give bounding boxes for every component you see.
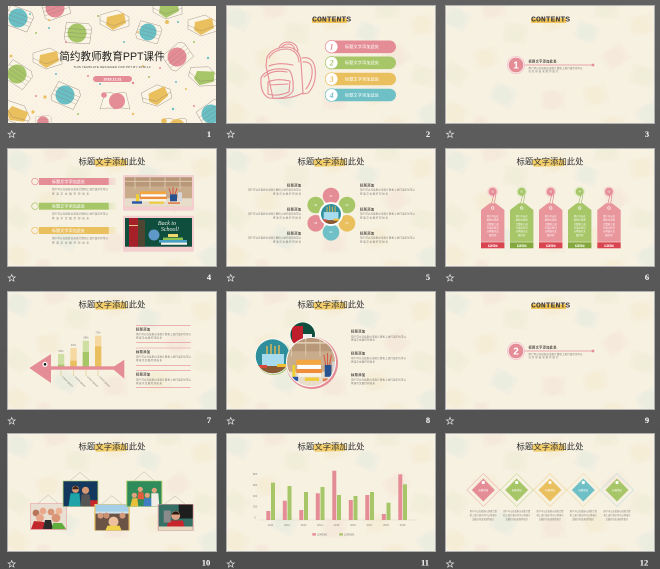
- bone labels: Lorem ipsum: [61, 376, 74, 388]
- title highlight: [94, 302, 127, 310]
- number 11: 11: [421, 558, 429, 568]
- right text 3: [360, 230, 415, 244]
- text block 3: 将演示文稿打印出来: [351, 381, 375, 385]
- diamond 3: 机上进行演示也可以将演示: [536, 513, 564, 517]
- chart legend: LOREM2: [344, 533, 355, 536]
- number 6: 6: [645, 272, 649, 282]
- bar chart: [253, 471, 417, 527]
- text block 2: [351, 350, 406, 363]
- right text block 3: 标题添加: [136, 372, 150, 377]
- bar chart: 2011: [268, 523, 274, 527]
- title highlight: [94, 159, 127, 167]
- tag 2: 标题添加: [517, 243, 527, 247]
- background: [220, 281, 446, 422]
- slide 8: circle photos: [226, 291, 436, 410]
- list item 1: 将演示文稿打印出来: [52, 192, 89, 196]
- photo frame 4: [126, 481, 162, 507]
- tag 5: 计算机上进: [603, 222, 616, 226]
- tag 4: 行演示也可: [574, 226, 586, 230]
- slide 3: section 1: [439, 0, 660, 136]
- number 5: 5: [426, 272, 430, 282]
- diamond 5: 机上进行演示也可以将演示: [604, 513, 631, 517]
- section number badge: [507, 342, 525, 360]
- right text block 2: 将演示文稿打印出来: [136, 358, 162, 362]
- background: [439, 423, 660, 564]
- icon: backpack: [261, 42, 315, 98]
- diamond 4: [567, 474, 600, 521]
- number 1: 1: [207, 129, 211, 139]
- right text 1: 标题添加: [360, 182, 374, 187]
- highlight: [531, 18, 566, 23]
- section description: 用户可以在投影仪或者计算机上进行演示也可以: [528, 66, 583, 70]
- menu item 2: 标题文字添加此处: [345, 59, 379, 65]
- petal diagram: [307, 188, 355, 241]
- connector line: [524, 64, 594, 66]
- bar chart: 2015: [334, 523, 340, 527]
- diamond 2: 文稿打印出来制作胶片: [505, 517, 529, 521]
- left text 2: 将演示文稿打印出来: [273, 216, 301, 220]
- diamond 3: 用户可以在投影仪或者计算: [536, 509, 564, 513]
- diamond 5: 用户可以在投影仪或者计算: [604, 509, 631, 513]
- menu item 2: [325, 56, 396, 69]
- right text 3: 用户可以在投影仪或者计算机上进行演示也可以: [360, 236, 415, 240]
- bar 4: [95, 331, 101, 367]
- section description: 在打印出来制作胶片: [528, 355, 559, 359]
- text block 2: 标题添加: [351, 350, 365, 355]
- tag 4: 计算机上进: [574, 222, 586, 226]
- slide 1: cover: [8, 6, 216, 123]
- tag 4: 用户可以在: [574, 214, 586, 218]
- slide 2: contents: [220, 0, 446, 136]
- tag 5: 用户可以在: [603, 214, 616, 218]
- right text 2: [360, 206, 415, 220]
- left text 1: 将演示文稿打印出来: [273, 192, 301, 196]
- background: [1, 423, 227, 564]
- text block 2: 将演示文稿打印出来: [351, 359, 375, 363]
- list item 2: 将演示文稿打印出来: [52, 216, 89, 220]
- menu item 4: [325, 89, 396, 101]
- left text 3: 用户可以在投影仪或者计算机上进行演示也可以: [248, 236, 301, 240]
- petal diagram: 03: [346, 222, 349, 225]
- icon: star 9: [446, 417, 454, 424]
- list item 1: 标题文字添加此处: [52, 178, 85, 184]
- number 10: 10: [202, 558, 210, 568]
- number 12: 12: [640, 558, 648, 568]
- diamond 1: 文稿打印出来制作胶片: [472, 517, 495, 521]
- right text 2: 标题添加: [360, 206, 374, 211]
- right text block 2: 标题添加: [136, 349, 150, 354]
- bar chart: 800: [253, 472, 258, 476]
- right text block 1: 将演示文稿打印出来: [136, 335, 162, 339]
- petal diagram: 04: [330, 231, 333, 234]
- section description: 在打印出来制作胶片: [528, 69, 559, 73]
- contents heading: CONTENTS: [312, 16, 352, 24]
- bar 2: [70, 343, 77, 367]
- photo frame 3: [94, 504, 130, 531]
- tag 5: 行演示也可: [603, 226, 616, 230]
- diamond 1: 机上进行演示也可以将演示: [470, 513, 498, 517]
- right text 1: 将演示文稿打印出来: [360, 192, 388, 196]
- left text 2: [248, 206, 301, 220]
- tag 3: [539, 186, 562, 248]
- diamond 3: 文稿打印出来制作胶片: [539, 517, 562, 521]
- tag 2: 用户可以在: [516, 214, 528, 218]
- right text 3: 将演示文稿打印出来: [360, 240, 388, 244]
- bar chart: 2018: [383, 523, 389, 527]
- slide 12: diamonds: [439, 423, 660, 564]
- icon: star 8: [227, 417, 234, 424]
- slide 11: bar chart: [220, 423, 446, 564]
- title: 标题文字添加此处: [516, 442, 584, 452]
- diamond 4: 用户可以在投影仪或者计算: [570, 509, 598, 513]
- text block 1: 将演示文稿打印出来: [351, 338, 375, 342]
- background: [1, 138, 227, 279]
- list item 2: 标题文字添加此处: [52, 203, 85, 209]
- diamond 1: [467, 474, 500, 521]
- menu item 4: 标题文字添加此处: [345, 92, 379, 98]
- tag 1: 以将演示文: [487, 229, 499, 233]
- tag 5: [597, 186, 621, 248]
- tag 4: 04: [578, 191, 582, 194]
- title: 标题文字添加此处: [516, 157, 584, 167]
- tag 3: 行演示也可: [545, 226, 557, 230]
- text block 1: 标题添加: [351, 329, 365, 334]
- list item 1: [32, 178, 116, 196]
- bar chart: 2014: [317, 523, 323, 527]
- title highlight: [313, 444, 346, 452]
- menu item 1: 1: [330, 43, 334, 52]
- petal diagram: 05: [314, 222, 318, 225]
- left text 1: 用户可以在投影仪或者计算机上进行演示也可以: [248, 188, 301, 192]
- slide 5: petal diagram: [226, 148, 436, 267]
- tag 4: 以将演示文: [574, 229, 586, 233]
- number 2: 2: [426, 129, 430, 139]
- menu item 3: [325, 73, 396, 85]
- title highlight: [532, 444, 565, 452]
- cover background with colourful books: [8, 6, 216, 123]
- bar 1: 50%: [58, 349, 64, 353]
- diamond 2: 机上进行演示也可以将演示: [503, 513, 531, 517]
- hanger strings: [38, 472, 185, 504]
- bar chart: 2017: [367, 523, 373, 527]
- section number badge: 2: [513, 347, 519, 358]
- background: [439, 138, 660, 279]
- menu item 3: 3: [329, 75, 334, 84]
- bar 1: [58, 349, 64, 367]
- background: [220, 423, 446, 564]
- photo circle: bookshelf: [286, 337, 338, 389]
- section description: [528, 66, 583, 73]
- menu item 2: 2: [329, 59, 334, 68]
- right text 2: 用户可以在投影仪或者计算机上进行演示也可以: [360, 212, 415, 216]
- diamond 4: 文稿打印出来制作胶片: [572, 517, 595, 521]
- icon: star 1: [8, 131, 15, 138]
- photo panel 1: [123, 175, 194, 211]
- slide 6: price tags: [439, 138, 660, 279]
- petal diagram: 02: [346, 204, 349, 207]
- cover subtitle: THIS TEMPLATE DESIGNED FOR PPT BY 2018.12: [74, 65, 151, 69]
- icon: star 10: [8, 560, 15, 567]
- section number badge: [507, 56, 525, 74]
- menu item 1: 标题文字添加此处: [345, 43, 379, 49]
- tag 3: 投影仪或者: [545, 218, 557, 222]
- slide 10: hanging photos: [1, 423, 227, 564]
- tag 4: 稿打印: [576, 233, 584, 237]
- background: [220, 0, 446, 136]
- photo circle: red book: [290, 322, 316, 344]
- tag 4: [568, 186, 591, 248]
- photo frame 1: [30, 503, 67, 530]
- icon: star 11: [227, 560, 234, 567]
- chart legend: [312, 533, 355, 536]
- left text 1: 标题添加: [287, 182, 301, 187]
- list item 3: [32, 227, 116, 244]
- icon: star 12: [446, 560, 454, 567]
- text block 1: [351, 329, 406, 342]
- text block 2: 用户可以在投影仪或者计算机上进行演示也可以: [351, 356, 406, 360]
- right text block 3: 将演示文稿打印出来: [136, 381, 162, 385]
- list item 3: 标题文字添加此处: [52, 227, 85, 233]
- diamond 4: 标题添加: [579, 488, 589, 492]
- right text block 3: 用户可以在投影仪或者计算机上进行演示也可以: [136, 377, 191, 381]
- title: 标题文字添加此处: [298, 442, 365, 452]
- highlight: [531, 304, 566, 309]
- tag 2: 02: [520, 191, 524, 194]
- menu item 1: [325, 40, 396, 53]
- title: 标题文字添加此处: [78, 442, 146, 452]
- photo circle: teal classroom: [255, 338, 291, 375]
- right text 3: 标题添加: [360, 230, 374, 235]
- slide 4: list with photos: [1, 138, 227, 279]
- tag 1: 计算机上进: [487, 222, 499, 226]
- icon: star 2: [227, 131, 234, 138]
- date pill: [93, 76, 132, 82]
- tag 1: 标题添加: [488, 243, 498, 247]
- number 9: 9: [645, 415, 649, 425]
- text block 1: 用户可以在投影仪或者计算机上进行演示也可以: [351, 334, 406, 338]
- section heading: 标题文字添加此处: [528, 59, 557, 64]
- title: 标题文字添加此处: [298, 300, 365, 310]
- background: [220, 138, 446, 279]
- menu item 3: 标题文字添加此处: [345, 76, 379, 82]
- bone labels: Lorem ipsum: [86, 376, 99, 388]
- tag 3: 计算机上进: [545, 222, 557, 226]
- bar 3: 58%: [83, 336, 89, 340]
- list item 2: 用户可以在投影仪或者计算机上进行演示也可以: [52, 212, 108, 216]
- tag 5: 投影仪或者: [603, 218, 616, 222]
- list item 2: [32, 203, 116, 220]
- diamond 5: 文稿打印出来制作胶片: [606, 517, 629, 521]
- petal diagram: 01: [330, 195, 333, 198]
- date pill: 2018.12.31: [104, 77, 122, 81]
- bar chart: 2013: [301, 523, 307, 527]
- tag 5: 以将演示文: [603, 229, 616, 233]
- title highlight: [313, 302, 346, 310]
- section description: [528, 352, 583, 359]
- left text 3: 标题添加: [287, 230, 301, 235]
- right text block 1: 用户可以在投影仪或者计算机上进行演示也可以: [136, 332, 191, 336]
- section heading: 标题文字添加此处: [528, 345, 557, 350]
- bone labels: [61, 370, 111, 388]
- tag 5: 05: [608, 191, 611, 194]
- tag 2: [510, 186, 533, 248]
- title highlight: [94, 444, 127, 452]
- left text 1: [248, 182, 301, 196]
- left text 3: 将演示文稿打印出来: [273, 240, 301, 244]
- left text 2: 标题添加: [287, 206, 301, 211]
- bar chart: 600: [253, 483, 258, 487]
- bar chart: 2019: [400, 523, 406, 527]
- diamond 3: [534, 474, 566, 521]
- diamond 2: 标题添加: [512, 488, 522, 492]
- bar 2: 60%: [71, 343, 77, 347]
- diamond 2: 用户可以在投影仪或者计算: [503, 509, 531, 513]
- petal diagram: 06: [314, 204, 318, 207]
- tag 3: 标题添加: [546, 243, 556, 247]
- connector line: [524, 350, 594, 352]
- icon: star 7: [8, 417, 15, 424]
- right text 1: 用户可以在投影仪或者计算机上进行演示也可以: [360, 188, 415, 192]
- diamond 5: [600, 474, 634, 521]
- tag 3: 用户可以在: [545, 214, 557, 218]
- right text block 3: [136, 370, 191, 387]
- tag 2: 行演示也可: [516, 226, 528, 230]
- tag 1: 稿打印: [489, 233, 497, 237]
- icon: star 5: [227, 274, 234, 281]
- bar 4: 70%: [95, 331, 101, 335]
- list item 3: 将演示文稿打印出来: [52, 240, 89, 244]
- tag 4: 标题添加: [575, 243, 585, 247]
- photo panel 2: [123, 216, 194, 252]
- tag 3: 03: [549, 191, 553, 194]
- bar chart: 2016: [350, 523, 356, 527]
- tag 1: 投影仪或者: [487, 218, 499, 222]
- diamond 1: 用户可以在投影仪或者计算: [470, 509, 498, 513]
- list item 1: 用户可以在投影仪或者计算机上进行演示也可以: [52, 187, 108, 191]
- bar chart: 0: [254, 515, 256, 519]
- contents heading: CONTENTS: [531, 16, 571, 24]
- left text 3: [248, 230, 301, 244]
- diamond 4: 机上进行演示也可以将演示: [570, 513, 598, 517]
- diamond 2: [500, 474, 533, 521]
- icon: star 4: [8, 274, 15, 281]
- number 7: 7: [207, 415, 212, 425]
- chart legend: LOREM1: [317, 533, 328, 536]
- list item 3: 用户可以在投影仪或者计算机上进行演示也可以: [52, 236, 108, 240]
- bar 3: [83, 336, 89, 367]
- photo frame 5: [158, 504, 194, 531]
- tag 3: 稿打印: [547, 233, 555, 237]
- text block 3: 用户可以在投影仪或者计算机上进行演示也可以: [351, 378, 406, 382]
- background: [439, 0, 660, 136]
- bone labels: Lorem ipsum: [98, 376, 111, 388]
- tag 1: [481, 186, 504, 248]
- left text 2: 用户可以在投影仪或者计算机上进行演示也可以: [248, 212, 301, 216]
- text block 3: [351, 372, 406, 385]
- tag 2: 计算机上进: [516, 222, 528, 226]
- tag 2: 以将演示文: [516, 229, 528, 233]
- right text block 2: [136, 348, 191, 365]
- background: [439, 281, 660, 422]
- menu item 4: 4: [329, 91, 334, 100]
- right text block 2: 用户可以在投影仪或者计算机上进行演示也可以: [136, 355, 191, 359]
- number 4: 4: [207, 272, 212, 282]
- right text block 1: [136, 325, 191, 342]
- number 8: 8: [426, 415, 430, 425]
- slide 7: fish chart: [1, 281, 227, 422]
- tag 5: 标题添加: [604, 243, 614, 247]
- right text 2: 将演示文稿打印出来: [360, 216, 388, 220]
- tag 1: 行演示也可: [487, 226, 499, 230]
- title highlight: [532, 159, 565, 167]
- tag 3: 以将演示文: [545, 229, 557, 233]
- title: 标题文字添加此处: [78, 300, 146, 310]
- contents heading: CONTENTS: [531, 302, 571, 310]
- section description: 用户可以在投影仪或者计算机上进行演示也可以: [528, 352, 583, 356]
- cover title: 简约教师教育PPT课件: [59, 50, 165, 63]
- icon: star 6: [446, 274, 454, 281]
- highlight: [312, 18, 347, 23]
- right text 1: [360, 182, 415, 196]
- tag 2: 投影仪或者: [516, 218, 528, 222]
- text block 3: 标题添加: [351, 372, 365, 377]
- tag 1: 用户可以在: [487, 214, 499, 218]
- background: [1, 281, 227, 422]
- diamond 1: 标题添加: [479, 488, 489, 492]
- tag 4: 投影仪或者: [574, 218, 586, 222]
- diamond 3: 标题添加: [545, 488, 555, 492]
- number 3: 3: [645, 129, 649, 139]
- icon: star 3: [446, 131, 454, 138]
- tag 2: 稿打印: [518, 233, 526, 237]
- bar chart: 400: [253, 494, 258, 498]
- section number badge: 1: [513, 61, 519, 72]
- tag 5: 稿打印: [605, 233, 613, 237]
- bar chart: 2012: [284, 523, 290, 527]
- slide 9: section 2: [439, 281, 660, 422]
- title: 标题文字添加此处: [298, 157, 365, 167]
- title highlight: [313, 159, 346, 167]
- title: 标题文字添加此处: [78, 157, 146, 167]
- bar chart: 200: [253, 505, 258, 509]
- photo frame 2: [63, 481, 98, 507]
- tag 1: 01: [491, 191, 495, 194]
- diamond 5: 标题添加: [612, 488, 622, 492]
- bone labels: Lorem ipsum: [74, 376, 86, 388]
- fish skeleton: [29, 354, 124, 383]
- right text block 1: 标题添加: [136, 326, 150, 331]
